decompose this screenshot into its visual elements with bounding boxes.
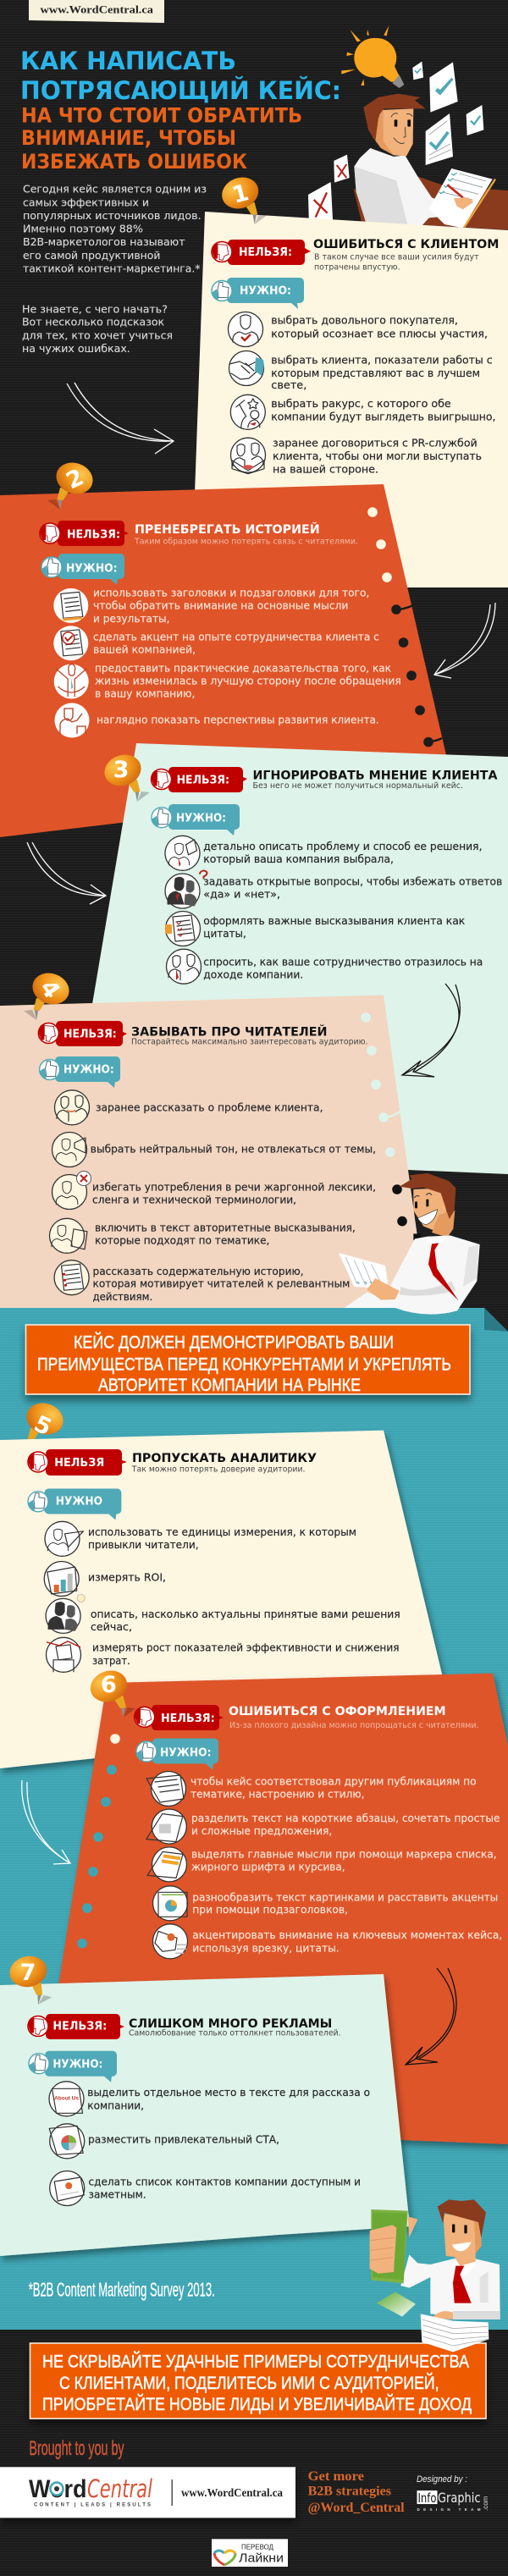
item text <box>191 1849 497 1873</box>
item text: на вашей стороне. <box>273 464 378 476</box>
item text: заранее договориться с PR-службой <box>273 437 478 449</box>
intro text: Вот несколько подсказок <box>22 316 165 328</box>
item text <box>93 632 379 656</box>
item text: выбрать ракурс, с которого обе <box>271 398 451 410</box>
heading and subtext <box>134 522 358 547</box>
item text <box>95 662 401 700</box>
item text: доходе компании. <box>203 968 303 980</box>
item text: заметным. <box>88 2189 146 2201</box>
icon: experience check <box>53 626 88 660</box>
item text: наглядно показать перспективы развития клиента. <box>97 714 379 726</box>
website label: www.WordCentral.ca <box>41 3 154 15</box>
pin number 7 <box>2 1948 58 2006</box>
illustration: smiling man with paper <box>339 1173 480 1315</box>
heading and subtext: Постарайтесь максимально заинтересовать аудиторию. <box>131 1038 367 1047</box>
pin number 3: 3 <box>113 757 129 783</box>
designer credit: .com <box>482 2496 489 2511</box>
designer credit <box>417 2474 489 2512</box>
item text: сейчас, <box>91 1621 132 1633</box>
item text <box>88 2176 361 2201</box>
badge: nuzhno <box>29 2051 117 2082</box>
chair <box>354 189 389 226</box>
intro text: на чужих ошибках. <box>22 342 130 355</box>
badge: nelzya: НЕЛЬЗЯ: <box>161 1712 215 1725</box>
heading and subtext <box>131 1024 367 1047</box>
pin number 2 <box>47 458 97 510</box>
twitter call to action: Get more <box>308 2469 364 2484</box>
item text: цитаты, <box>203 928 246 940</box>
head <box>443 2214 481 2266</box>
badge: nelzya: НЕЛЬЗЯ: <box>177 774 229 787</box>
intro text: тактикой контент-маркетинга.* <box>23 262 200 274</box>
badge: nuzhno: НУЖНО: <box>66 562 117 576</box>
item text: которые подходят по тематике, <box>95 1234 269 1246</box>
logo box: WordCentral: www.WordCentral.ca <box>181 2487 283 2500</box>
icon: relevance of decisions <box>46 1594 85 1633</box>
badge: nelzya <box>135 1705 224 1730</box>
icon: happy man <box>54 664 89 699</box>
translation badge <box>212 2539 288 2567</box>
teal section <box>0 1308 508 2330</box>
item text: вашей компанией, <box>93 644 196 656</box>
icon: happy client <box>229 312 262 347</box>
website label <box>29 0 164 23</box>
item text: жизнь изменилась в лучшую сторону после обращения <box>95 675 401 687</box>
papers with crosses <box>308 155 350 226</box>
illustration: man with bulb and papers <box>308 25 508 230</box>
item text <box>88 1526 356 1551</box>
item text: сделать список контактов компании доступным и <box>88 2176 361 2188</box>
icon: client problem <box>54 1090 90 1125</box>
paper stack <box>421 2311 489 2352</box>
logo box: WordCentral: Central <box>87 2474 152 2503</box>
item text <box>192 1929 502 1954</box>
item text <box>203 841 483 865</box>
badge: nelzya: НЕЛЬЗЯ: <box>239 245 292 259</box>
banner: case must demonstrate advantages <box>25 1325 470 1395</box>
badge: nelzya: НЕЛЬЗЯ: <box>67 527 120 541</box>
item text: в вашу компанию, <box>95 688 195 700</box>
item text: затрат. <box>92 1655 130 1667</box>
designer credit: DESIGN TEAM <box>417 2507 481 2512</box>
item text: избегать употребления в речи жаргонной лексики, <box>92 1182 376 1194</box>
badge: nuzhno <box>136 1739 218 1769</box>
panel 1: mistake with client <box>191 173 508 587</box>
badge: nuzhno <box>41 554 124 585</box>
item text: разместить привлекательный СТА, <box>88 2134 279 2146</box>
title: НА ЧТО СТОИТ ОБРАТИТЬ <box>21 104 302 128</box>
icon: winning angle <box>230 394 265 429</box>
heading and subtext: потрачены впустую. <box>314 262 400 272</box>
item text: клиента, чтобы они могли выступать <box>273 450 482 462</box>
intro text: Не знаете, с чего начать? <box>22 302 168 315</box>
pin number 7: 7 <box>20 1960 36 1986</box>
item text: «да» и «нет», <box>203 889 280 901</box>
pin number 1: 1 <box>229 179 251 209</box>
heading and subtext: Из-за плохого дизайна можно попрощаться с читателями. <box>229 1721 479 1730</box>
title: ИЗБЕЖАТЬ ОШИБОК <box>21 150 247 174</box>
intro text: самых эффективных и <box>23 196 149 208</box>
icon: matching publication <box>146 1771 186 1807</box>
badge: nuzhno: НУЖНО <box>56 1495 102 1509</box>
item text: использовать заголовки и подзаголовки для того, <box>93 587 369 599</box>
badge: nuzhno <box>28 1488 121 1520</box>
item text: и результаты, <box>93 613 169 625</box>
item text <box>203 957 483 980</box>
item text <box>190 1776 477 1800</box>
intro text: его самой продуктивной <box>23 249 160 262</box>
item text: включить в текст авторитетные высказывания, <box>95 1222 356 1234</box>
item text: привыкли читатели, <box>88 1539 199 1551</box>
badge: nelzya <box>212 240 311 265</box>
item text: разнообразить текст картинками и расставить акценты <box>192 1891 498 1903</box>
binder holes <box>361 1012 407 1226</box>
item text: акцентировать внимание на ключевых моментах кейса, <box>192 1929 502 1941</box>
icon: quotes <box>165 911 200 946</box>
icon: authoritative quotes <box>49 1218 87 1253</box>
heading and subtext: Самолюбование только оттолкнет пользователей. <box>129 2029 341 2038</box>
pin number 3 <box>100 750 150 802</box>
logo box: WordCentral <box>0 2467 295 2518</box>
icon: growth tracking <box>46 1637 81 1672</box>
intro text: B2B-маркетологов называют <box>23 235 185 248</box>
badge: nelzya <box>40 521 129 546</box>
item text: который осознает все плюсы участия, <box>271 328 488 339</box>
banner: do not hide successes: С КЛИЕНТАМИ, ПОДЕЛИТЕСЬ ИМИ С АУДИТОРИЕЙ, <box>59 2373 439 2393</box>
brought to you by: Brought to you by <box>29 2437 124 2460</box>
item text: разделить текст на короткие абзацы, сочетать простые <box>191 1812 500 1824</box>
designer credit: Graphic <box>438 2490 481 2506</box>
item text: действиям. <box>93 1291 152 1303</box>
heading and subtext <box>252 769 498 791</box>
icon: short paragraphs <box>146 1809 186 1844</box>
notebook <box>429 168 493 228</box>
item text <box>95 1222 356 1246</box>
item text <box>93 587 369 625</box>
item text: и сложные предложения, <box>191 1825 332 1837</box>
translation badge: Лайкни <box>239 2551 284 2566</box>
item text: компании, <box>87 2100 144 2112</box>
item text: заранее рассказать о проблеме клиента, <box>96 1102 323 1114</box>
title: ПОТРЯСАЮЩИЙ КЕЙС: <box>20 76 341 105</box>
icon: ROI chart <box>44 1561 79 1597</box>
item text: выбрать клиента, показатели работы с <box>271 354 493 366</box>
item text: задавать открытые вопросы, чтобы избежать ответов <box>203 875 502 887</box>
item text <box>91 1608 400 1633</box>
item text: которым представляют вас в лучшем <box>271 367 480 379</box>
heading and subtext: Таким образом можно потерять связь с читателями. <box>134 538 358 547</box>
item text <box>192 1891 498 1916</box>
badge: nuzhno: НУЖНО: <box>52 2057 102 2071</box>
heading and subtext: Без него не может получиться нормальный кейс. <box>252 781 463 791</box>
icon: units of measure <box>45 1521 83 1556</box>
item text <box>87 2087 370 2112</box>
item text <box>93 1266 350 1303</box>
badge: nuzhno <box>152 804 240 836</box>
icon: growth perspective <box>54 703 90 737</box>
panel 3: ignore client's opinion <box>91 743 508 1174</box>
icon: PR service <box>230 438 266 474</box>
item text: используя врезку, цитаты. <box>192 1942 340 1954</box>
twitter call to action: B2B strategies <box>308 2485 391 2499</box>
arrow: intro to panel 1 <box>67 383 174 454</box>
item text: которая мотивирует читателей к релевантным <box>93 1278 350 1290</box>
panel 2: neglect history <box>0 458 449 837</box>
arrow: panel 5 to panel 7 <box>22 1780 70 1864</box>
panel 6: design mistake <box>58 1666 508 2144</box>
icon: no jargon <box>52 1172 91 1209</box>
item text <box>203 915 465 940</box>
item text: который ваша компания выбрала, <box>203 853 394 865</box>
pin number 1 <box>218 173 268 224</box>
badge: nelzya <box>28 1449 127 1476</box>
icon: contacts list <box>50 2171 85 2206</box>
item text <box>271 398 496 423</box>
item text <box>92 1182 376 1206</box>
icon: describing problem <box>165 836 200 870</box>
intro text: Сегодня кейс является одним из <box>23 183 207 196</box>
heading and subtext: Так можно потерять доверие аудитории. <box>131 1465 305 1475</box>
item text <box>203 875 502 901</box>
item text: выбрать нейтральный тон, не отвлекаться от темы, <box>91 1143 376 1155</box>
item text: измерять рост показателей эффективности и снижения <box>92 1642 400 1654</box>
heading and subtext: ОШИБИТЬСЯ С КЛИЕНТОМ <box>313 238 499 251</box>
badge: nuzhno <box>212 278 304 309</box>
item text: выделить отдельное место в тексте для рассказа о <box>87 2087 370 2099</box>
heading and subtext: ИГНОРИРОВАТЬ МНЕНИЕ КЛИЕНТА <box>252 769 498 782</box>
heading and subtext: СЛИШКОМ МНОГО РЕКЛАМЫ <box>129 2017 332 2031</box>
icon: highlighted text <box>147 1847 186 1882</box>
arrow: panel 3 to panel 4 <box>402 984 460 1077</box>
shirt <box>400 2254 500 2320</box>
pin number 2: 2 <box>63 464 88 494</box>
banner: case must demonstrate advantages: АВТОРИТЕТ КОМПАНИИ НА РЫНКЕ <box>98 1376 361 1395</box>
badge: nuzhno: НУЖНО: <box>160 1746 212 1760</box>
heading and subtext <box>131 1452 317 1475</box>
intro text: Именно поэтому 88% <box>23 222 143 234</box>
icon: handshake <box>229 350 264 386</box>
hand <box>454 197 473 209</box>
item text: чтобы кейс соответствовал другим публикациям по <box>190 1776 477 1788</box>
item text <box>273 437 482 476</box>
item text <box>191 1812 500 1837</box>
item text: выделять главные мысли при помощи маркера списка, <box>191 1849 497 1861</box>
icon: about us page <box>49 2082 84 2116</box>
item text <box>92 1642 400 1667</box>
pin number 5: 5 <box>30 1410 55 1441</box>
item text: сделать акцент на опыте сотрудничества клиента с <box>93 632 379 643</box>
illustration: man with money <box>370 2199 500 2352</box>
panel 7: too much advertising <box>0 1948 410 2256</box>
item text: спросить, как ваше сотрудничество отразилось на <box>203 957 483 968</box>
item text: описать, насколько актуальны принятые вами решения <box>91 1608 400 1620</box>
badge: nelzya <box>38 1021 127 1046</box>
panel 4: forget the readers <box>0 968 428 1309</box>
badge: nuzhno <box>40 1056 120 1088</box>
item text: тематике, настроению и стилю, <box>190 1788 364 1800</box>
papers with checks <box>412 62 483 165</box>
badge: nelzya <box>28 2014 124 2039</box>
badge: nelzya: НЕЛЬЗЯ: <box>52 2019 107 2033</box>
badge: nuzhno: НУЖНО: <box>176 812 226 825</box>
intro text <box>22 183 207 355</box>
intro text: для тех, кто хочет учиться <box>22 329 173 342</box>
falling banknote <box>377 2292 416 2317</box>
designer credit: Info <box>418 2491 437 2506</box>
pin number 6: 6 <box>101 1672 117 1698</box>
translation badge: ПЕРЕВОД <box>241 2544 274 2551</box>
title: ВНИМАНИЕ, ЧТОБЫ <box>21 126 236 150</box>
icon: CTA chart <box>49 2124 85 2159</box>
logo box: WordCentral: Word <box>29 2475 86 2503</box>
icon: about us page: About Us <box>54 2095 79 2101</box>
badge: nuzhno: НУЖНО: <box>240 284 291 298</box>
shirt <box>354 148 461 227</box>
binder holes <box>367 507 442 747</box>
title: КАК НАПИСАТЬ <box>20 47 236 75</box>
item text: использовать те единицы измерения, к которым <box>88 1526 356 1538</box>
heading and subtext: ПРЕНЕБРЕГАТЬ ИСТОРИЕЙ <box>135 522 320 537</box>
icon: key moments <box>152 1924 188 1959</box>
intro text: популярных источников лидов. <box>23 209 202 222</box>
icon: pictures and accents <box>152 1886 188 1921</box>
item text <box>271 315 488 339</box>
icon: talking clients <box>166 949 202 984</box>
item text <box>271 354 493 391</box>
footnote: *B2B Content Marketing Survey 2013. <box>29 2279 215 2301</box>
head <box>373 108 413 156</box>
badge: nuzhno: НУЖНО: <box>64 1062 114 1076</box>
icon: headings document <box>53 588 88 623</box>
icon: neutral tone <box>52 1133 86 1167</box>
heading and subtext: ПРОПУСКАТЬ АНАЛИТИКУ <box>132 1452 317 1465</box>
heading and subtext: В таком случае все ваши усилия будут <box>314 252 479 262</box>
item text: свете, <box>271 379 306 391</box>
heading and subtext <box>229 1705 479 1730</box>
badge: nelzya <box>152 767 247 792</box>
item text: компании будут выглядеть выигрышно, <box>271 411 496 423</box>
arrow: panel 2 to panel 3 <box>434 603 495 678</box>
icon: light bulb <box>341 25 404 88</box>
item text: предоставить практические доказательства того, как <box>95 662 391 674</box>
banner: case must demonstrate advantages: КЕЙС ДОЛЖЕН ДЕМОНСТРИРОВАТЬ ВАШИ <box>74 1332 394 1353</box>
pin number 4 <box>24 968 74 1020</box>
item text: чтобы обратить внимание на основные мысли <box>93 600 348 612</box>
designer credit: Designed by : <box>417 2474 467 2485</box>
item text: при помощи подзаголовков, <box>192 1904 348 1916</box>
item text: выбрать довольного покупателя, <box>271 315 458 327</box>
badge: nelzya: НЕЛЬЗЯ <box>54 1456 104 1470</box>
binder holes <box>77 1734 120 1949</box>
icon: open questions <box>165 870 207 908</box>
heading and subtext <box>313 238 499 272</box>
item text: детально описать проблему и способ ее решения, <box>203 841 483 852</box>
item text: рассказать содержательную историю, <box>93 1266 304 1277</box>
logo box: WordCentral: CONTENT | LEADS | RESULTS <box>34 2502 151 2507</box>
money in fist <box>370 2209 417 2283</box>
pin number 6 <box>86 1666 135 1718</box>
title <box>20 47 341 174</box>
icon: story list <box>54 1260 89 1295</box>
heading and subtext: ЗАБЫВАТЬ ПРО ЧИТАТЕЛЕЙ <box>131 1024 327 1039</box>
arrow: panel 6 to panel 7 <box>406 1968 456 2065</box>
pin number 5 <box>18 1398 68 1450</box>
twitter call to action: @Word_Central <box>308 2501 405 2515</box>
panel 5: skip analytics <box>0 1431 444 1768</box>
pin number 4: 4 <box>35 975 65 1003</box>
desk <box>412 176 508 230</box>
heading and subtext: ОШИБИТЬСЯ С ОФОРМЛЕНИЕМ <box>229 1705 446 1718</box>
heading and subtext <box>129 2017 341 2038</box>
item text: сленга и технической терминологии, <box>92 1194 296 1206</box>
item text: измерять ROI, <box>88 1571 166 1583</box>
twitter call to action <box>308 2469 405 2515</box>
banner: do not hide successes <box>30 2343 486 2419</box>
item text: оформлять важные высказывания клиента как <box>203 915 465 927</box>
arrow: panel 2 to panel 3 left <box>27 842 106 904</box>
badge: nelzya: НЕЛЬЗЯ: <box>64 1028 117 1041</box>
item text: жирного шрифта и курсива, <box>191 1862 345 1873</box>
